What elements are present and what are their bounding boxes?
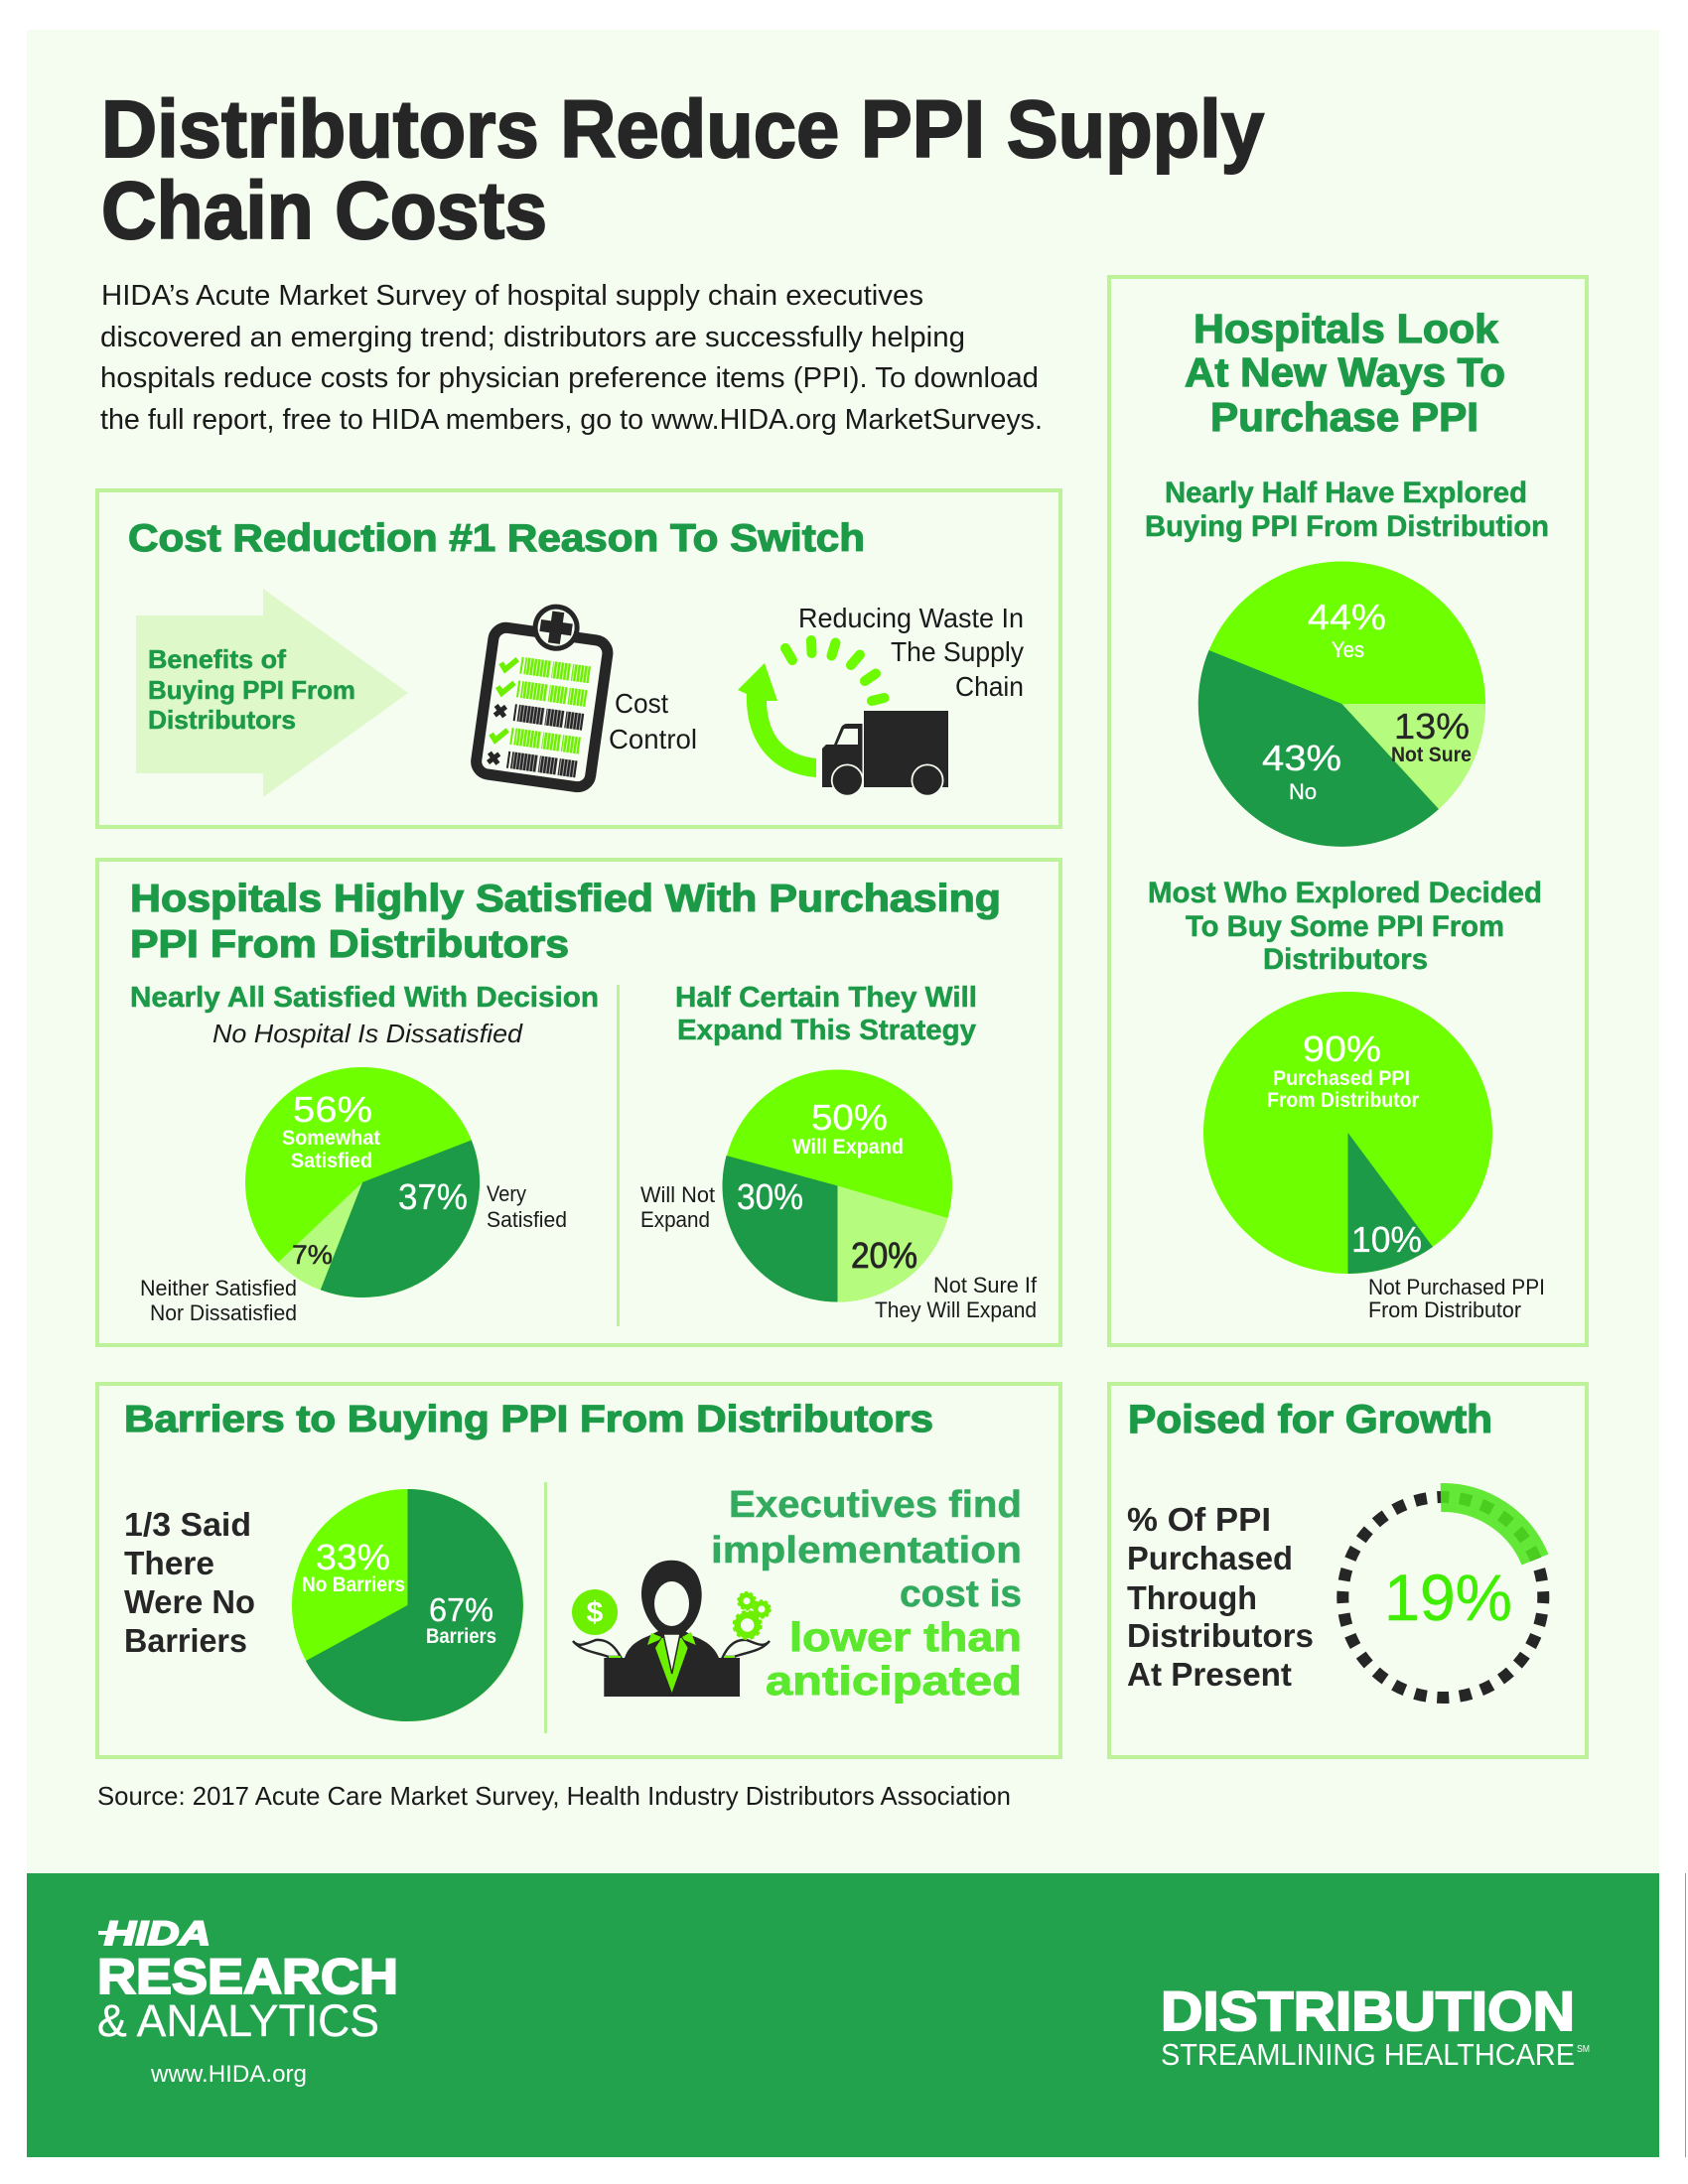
heading: satisfaction: Hospitals Highly Satisfied With Purchasing	[130, 878, 1001, 920]
icon: executive figure	[572, 1561, 771, 1697]
callout: executives find: lower than	[789, 1614, 1022, 1660]
label: reducing waste: Reducing Waste In	[798, 603, 1024, 633]
subheading: most who explored: Distributors	[1263, 943, 1428, 976]
panel: cost reduction	[97, 490, 1060, 827]
pie chart: satisfaction: 37%	[398, 1176, 468, 1217]
label: neither satisfied	[140, 1276, 297, 1325]
pie chart: explored: Yes	[1332, 637, 1364, 662]
logo: HIDA research and analytics: www.HIDA.org	[150, 2061, 307, 2088]
subheading: most who explored: To Buy Some PPI From	[1186, 910, 1504, 943]
label: cost control: Cost	[615, 688, 668, 719]
pie chart: purchased: 10%	[1351, 1219, 1422, 1260]
pie chart: expansion: 30%	[737, 1176, 803, 1217]
title: Chain Costs	[101, 166, 547, 256]
logo: distribution streamlining healthcare: STREAMLINING HEALTHCARE	[1161, 2037, 1575, 2072]
subheading: no hospital dissatisfied: No Hospital Is Dissatisfied	[212, 1019, 524, 1048]
subheading: nearly all satisfied: Nearly All Satisfied With Decision	[130, 982, 599, 1014]
intro text	[100, 280, 1043, 436]
text: one third: Barriers	[124, 1622, 247, 1659]
heading: cost reduction: Cost Reduction #1 Reason To Switch	[128, 517, 865, 560]
label: not purchased	[1368, 1275, 1545, 1322]
callout: executives find: Executives find	[729, 1484, 1022, 1526]
label: cost control: Control	[609, 724, 697, 754]
logo: HIDA research and analytics: & ANALYTICS	[97, 1995, 379, 2046]
label: neither satisfied: Neither Satisfied	[140, 1276, 297, 1300]
heading: new ways: Purchase PPI	[1210, 394, 1478, 440]
icon: gears	[734, 1592, 771, 1638]
logo: distribution streamlining healthcare: SM	[1577, 2044, 1590, 2055]
arrow: benefits: Distributors	[148, 705, 296, 735]
pie chart: explored: 44%	[1308, 597, 1386, 637]
pie chart: explored: 43%	[1262, 738, 1341, 778]
heading: satisfaction	[130, 878, 1001, 966]
label: neither satisfied: Nor Dissatisfied	[150, 1300, 297, 1325]
label: reducing waste: The Supply	[891, 636, 1024, 667]
logo: HIDA research and analytics	[97, 1915, 398, 2088]
logo: distribution streamlining healthcare	[1161, 1979, 1590, 2072]
pie chart: expansion: 20%	[851, 1235, 917, 1276]
pie chart: satisfaction	[245, 1067, 480, 1297]
logo: distribution streamlining healthcare: DISTRIBUTION	[1161, 1979, 1575, 2042]
label: will not expand: Will Not	[640, 1182, 715, 1207]
label: will not expand: Expand	[640, 1207, 710, 1232]
pie chart: barriers: Barriers	[426, 1625, 496, 1648]
pie chart: barriers: No Barriers	[302, 1573, 405, 1596]
logo: HIDA research and analytics: HIDA	[104, 1915, 211, 1953]
pie chart: barriers: 33%	[316, 1537, 390, 1577]
pie chart: expansion: Will Expand	[792, 1136, 904, 1159]
pie chart: purchased	[1203, 992, 1492, 1274]
text: one third: Were No	[124, 1583, 255, 1620]
text: percent of PPI: % Of PPI	[1127, 1501, 1271, 1538]
pie chart: expansion: 50%	[811, 1097, 888, 1138]
heading: new ways	[1185, 306, 1505, 440]
heading: poised: Poised for Growth	[1128, 1398, 1492, 1441]
intro text: HIDA’s Acute Market Survey of hospital supply chain executives	[101, 280, 923, 312]
pie chart: purchased: Purchased PPI	[1273, 1067, 1410, 1090]
text: one third: There	[124, 1545, 214, 1581]
label: not sure: Not Sure If	[933, 1273, 1038, 1297]
pie chart: satisfaction: 7%	[292, 1240, 333, 1270]
callout: executives find: anticipated	[766, 1658, 1022, 1704]
label: cost control	[609, 688, 697, 754]
panel: barriers	[97, 1384, 1060, 1757]
callout: executives find: cost is	[900, 1573, 1022, 1615]
pie chart: explored: Not Sure	[1391, 744, 1472, 766]
title: Distributors Reduce PPI Supply	[101, 84, 1264, 175]
subheading: nearly half: Buying PPI From Distribution	[1145, 510, 1549, 543]
text: percent of PPI: Purchased	[1127, 1540, 1293, 1576]
subheading: nearly half	[1145, 477, 1549, 543]
text: one third: 1/3 Said	[124, 1506, 251, 1543]
arrow: benefits: Buying PPI From	[148, 675, 355, 705]
pie chart: expansion	[723, 1070, 952, 1302]
title	[101, 84, 1264, 256]
heading: satisfaction: PPI From Distributors	[130, 923, 569, 966]
text: percent of PPI: Through	[1127, 1579, 1257, 1616]
gauge: 19 percent: 19%	[1384, 1561, 1512, 1634]
pie chart: satisfaction: 56%	[293, 1089, 372, 1130]
label: not purchased: From Distributor	[1368, 1297, 1521, 1322]
label: very satisfied	[487, 1181, 567, 1232]
label: very satisfied: Very	[487, 1181, 526, 1206]
label: will not expand	[640, 1182, 715, 1232]
label: reducing waste: Chain	[955, 671, 1024, 702]
intro text: hospitals reduce costs for physician preference items (PPI). To download	[100, 362, 1039, 394]
pie chart: barriers	[292, 1489, 523, 1721]
pie chart: purchased: From Distributor	[1267, 1089, 1419, 1112]
panel: new ways to purchase	[1109, 277, 1587, 1345]
logo: HIDA research and analytics: RESEARCH	[97, 1949, 398, 2004]
text: percent of PPI	[1127, 1501, 1314, 1693]
subheading: nearly half: Nearly Half Have Explored	[1165, 477, 1527, 509]
arrow: benefits	[136, 589, 408, 797]
label: very satisfied: Satisfied	[487, 1207, 567, 1232]
text: one third	[124, 1506, 255, 1659]
label: reducing waste	[798, 603, 1024, 702]
footer band	[27, 1873, 1659, 2157]
subheading: half certain: Expand This Strategy	[677, 1015, 976, 1046]
label: not sure	[875, 1273, 1038, 1322]
icon: clipboard	[475, 599, 613, 788]
arrow: benefits: Benefits of	[148, 644, 286, 674]
intro text: the full report, free to HIDA members, go to www.HIDA.org MarketSurveys.	[100, 404, 1043, 436]
heading: new ways: At New Ways To	[1185, 349, 1505, 395]
label: not purchased: Not Purchased PPI	[1368, 1275, 1545, 1299]
pie chart: explored	[1198, 562, 1485, 847]
callout: executives find	[711, 1484, 1022, 1704]
text: percent of PPI: At Present	[1127, 1656, 1292, 1693]
subheading: most who explored	[1148, 877, 1542, 976]
icon: dollar coin: $	[587, 1596, 604, 1629]
icon: dollar coin	[572, 1589, 618, 1635]
heading: barriers: Barriers to Buying PPI From Distributors	[124, 1399, 933, 1440]
intro text: discovered an emerging trend; distributors are successfully helping	[100, 322, 965, 353]
icon: truck	[822, 711, 948, 796]
pie chart: satisfaction: Satisfied	[291, 1150, 372, 1172]
panel: poised for growth	[1109, 1384, 1587, 1757]
pie chart: explored: No	[1289, 779, 1317, 804]
icon: curved arrow	[738, 640, 884, 777]
text: percent of PPI: Distributors	[1127, 1617, 1314, 1654]
label: not sure: They Will Expand	[875, 1297, 1037, 1322]
pie chart: explored: 13%	[1394, 706, 1470, 747]
panel: satisfaction	[97, 860, 1060, 1345]
subheading: most who explored: Most Who Explored Decided	[1148, 877, 1542, 909]
pie chart: satisfaction: Somewhat	[282, 1127, 380, 1150]
subheading: half certain: Half Certain They Will	[675, 982, 977, 1014]
subheading: half certain	[675, 982, 977, 1046]
source note: Source: 2017 Acute Care Market Survey, Health Industry Distributors Association	[97, 1781, 1011, 1811]
callout: executives find: implementation	[711, 1530, 1022, 1571]
pie chart: barriers: 67%	[429, 1591, 493, 1628]
pie chart: purchased: 90%	[1303, 1028, 1381, 1069]
gauge: 19 percent	[1342, 1497, 1543, 1698]
heading: new ways: Hospitals Look	[1194, 306, 1498, 351]
